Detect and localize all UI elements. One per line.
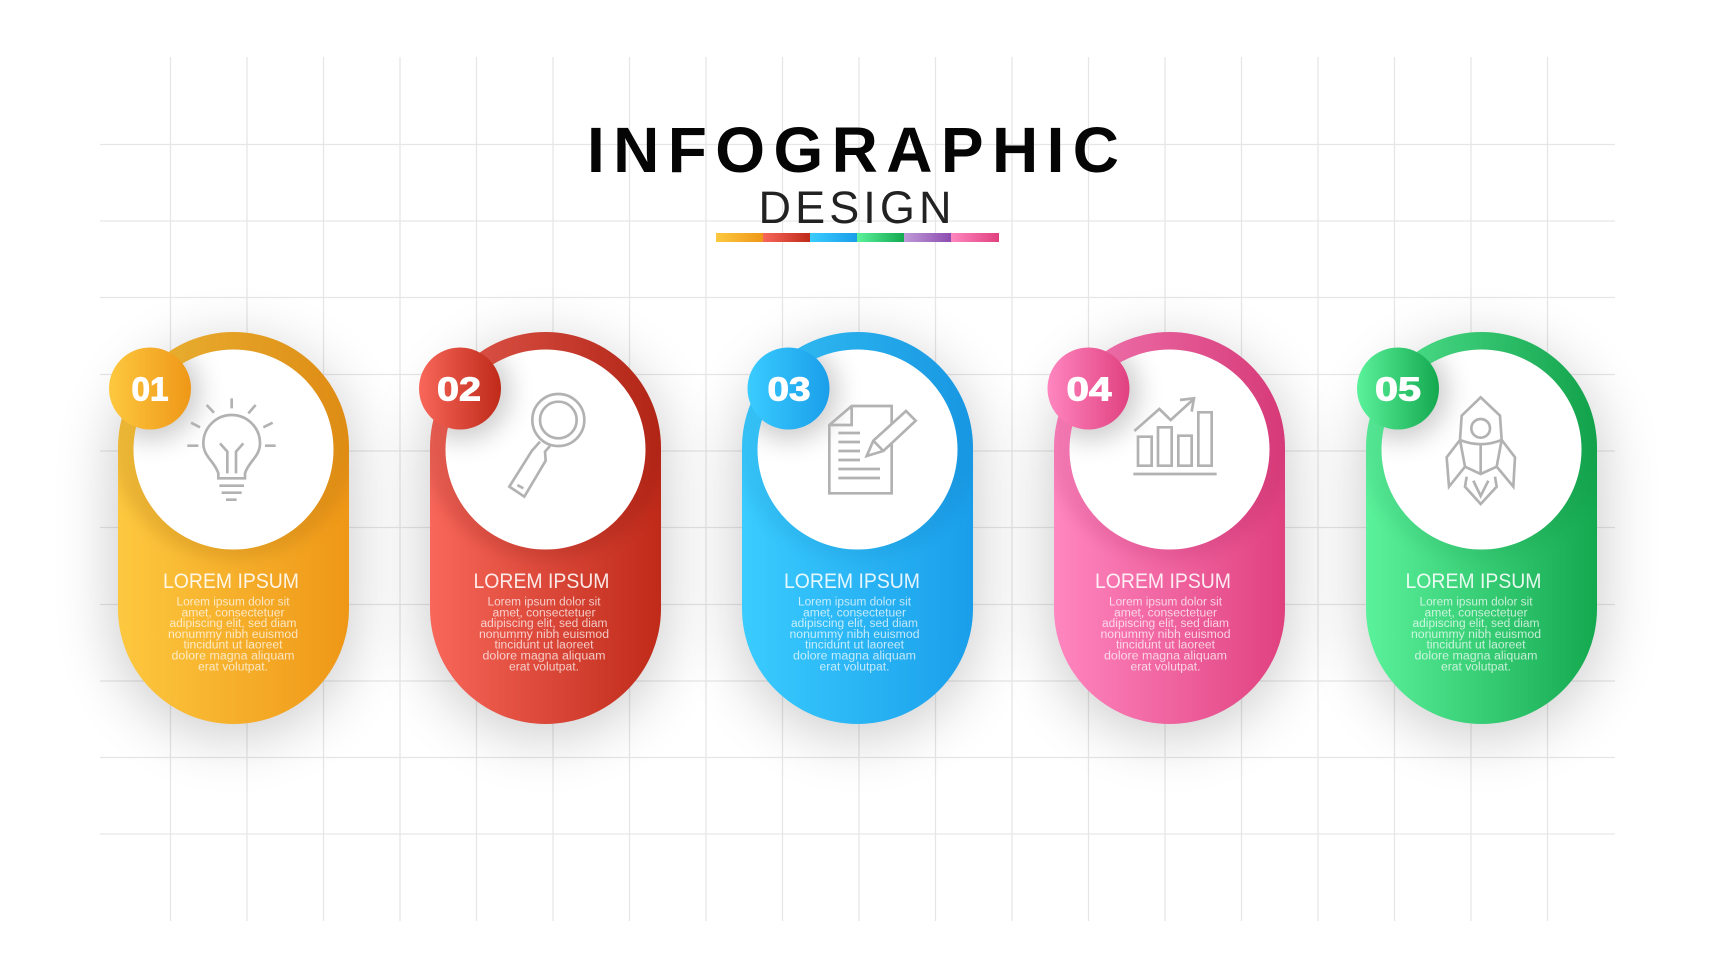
icon: rocket — [1447, 397, 1515, 504]
body text: nonummy nibh euismod — [790, 629, 920, 641]
body text: amet, consectetuer — [1424, 607, 1528, 619]
body text: Lorem ipsum dolor sit — [176, 596, 290, 608]
number badge 04: 04 — [1066, 370, 1112, 408]
body text: amet, consectetuer — [803, 607, 906, 619]
body text: adipiscing elit, sed diam — [791, 618, 918, 630]
heading: LOREM IPSUM — [1095, 570, 1231, 593]
body text: tincidunt ut laoreet — [805, 640, 905, 652]
body text: Lorem ipsum dolor sit — [1420, 596, 1533, 608]
icon: magnifying glass — [509, 394, 584, 497]
number badge 05: 05 — [1375, 370, 1421, 408]
number badge 05 — [1357, 348, 1439, 430]
number badge 02: 02 — [437, 370, 481, 408]
body text: adipiscing elit, sed diam — [170, 618, 296, 630]
body text — [790, 596, 920, 673]
body text: tincidunt ut laoreet — [1116, 640, 1216, 652]
body text: dolore magna aliquam — [1104, 650, 1227, 662]
body text: Lorem ipsum dolor sit — [488, 596, 601, 608]
body text: dolore magna aliquam — [482, 650, 606, 662]
body text: amet, consectetuer — [1114, 607, 1217, 619]
body text: erat volutpat. — [1441, 661, 1511, 673]
heading: LOREM IPSUM — [163, 570, 299, 593]
body text — [1100, 596, 1230, 673]
subtitle: DESIGN — [758, 182, 952, 233]
panel: step 05 — [1352, 312, 1606, 736]
body text — [1411, 596, 1541, 673]
panel: step 03 — [734, 312, 982, 736]
body text: adipiscing elit, sed diam — [1412, 618, 1540, 630]
number badge 01 — [109, 348, 191, 430]
icon: light bulb — [187, 398, 276, 500]
number badge 01: 01 — [132, 370, 168, 408]
body text: adipiscing elit, sed diam — [1102, 618, 1229, 630]
panel: step 04 — [1043, 312, 1294, 736]
icon: growth chart — [1133, 398, 1217, 474]
number badge 03: 03 — [768, 370, 810, 408]
body text: erat volutpat. — [820, 661, 890, 673]
body text: Lorem ipsum dolor sit — [1109, 596, 1223, 608]
heading: LOREM IPSUM — [784, 570, 920, 593]
body text: amet, consectetuer — [492, 607, 596, 619]
body text: dolore magna aliquam — [793, 650, 916, 662]
body text: tincidunt ut laoreet — [184, 640, 283, 652]
body text: Lorem ipsum dolor sit — [798, 596, 912, 608]
body text: dolore magna aliquam — [1414, 650, 1538, 662]
body text: nonummy nibh euismod — [479, 629, 609, 641]
rainbow divider bar — [716, 233, 999, 242]
panel: step 01 — [104, 312, 358, 736]
heading: LOREM IPSUM — [474, 570, 610, 593]
number badge 02 — [419, 348, 501, 430]
body text: tincidunt ut laoreet — [1426, 640, 1526, 652]
body text: erat volutpat. — [1130, 661, 1200, 673]
body text: adipiscing elit, sed diam — [480, 618, 608, 630]
icon: document and pencil — [829, 406, 916, 493]
body text: nonummy nibh euismod — [1100, 629, 1230, 641]
panel: step 02 — [414, 312, 670, 736]
body text: erat volutpat. — [509, 661, 579, 673]
body text — [479, 596, 609, 673]
body text: nonummy nibh euismod — [168, 629, 298, 641]
body text: erat volutpat. — [198, 661, 268, 673]
title: INFOGRAPHIC — [587, 114, 1119, 186]
body text: amet, consectetuer — [182, 607, 285, 619]
body text: nonummy nibh euismod — [1411, 629, 1541, 641]
body text: tincidunt ut laoreet — [494, 640, 594, 652]
number badge 04 — [1048, 348, 1130, 430]
number badge 03 — [748, 348, 830, 430]
body text — [168, 596, 298, 673]
heading: LOREM IPSUM — [1406, 570, 1542, 593]
body text: dolore magna aliquam — [172, 650, 294, 662]
